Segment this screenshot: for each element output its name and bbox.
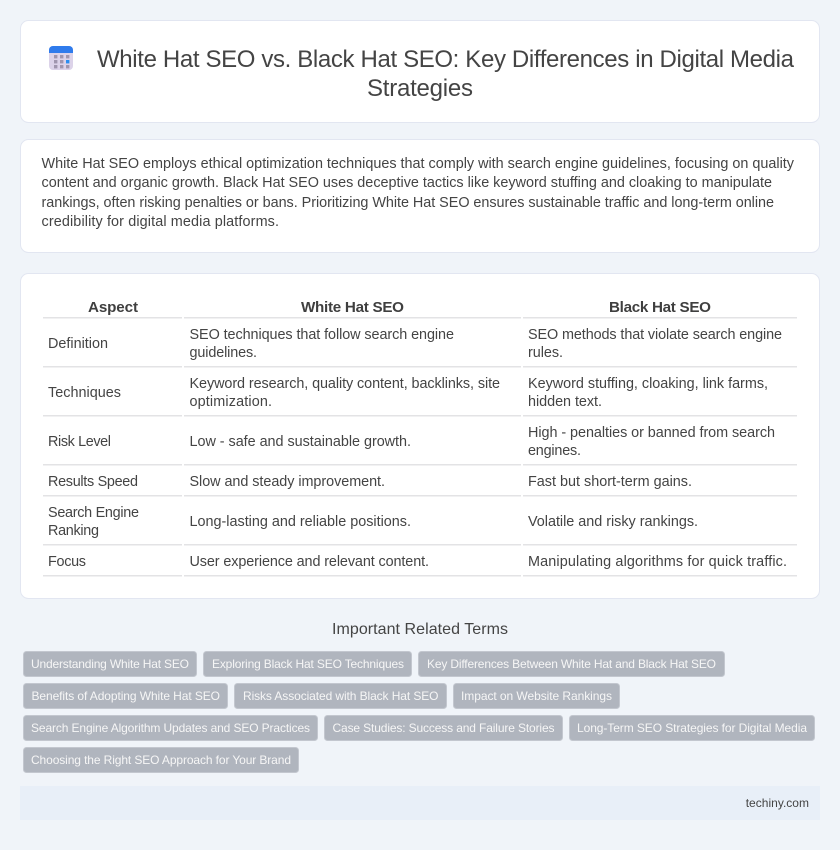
tag: risks: Risks Associated with Black Hat SEO [243,689,438,703]
tag: risks [234,684,446,708]
row: search engine ranking [43,505,797,546]
panel: introduction text [20,140,820,252]
row: definition: rules. [528,345,563,361]
panel: introduction text: rankings, often risking penalties or bans. Prioritizing White Hat SEO ensures sustainable traffic and long-term online [42,195,774,211]
panel: introduction text: White Hat SEO employs ethical optimization techniques that comply with search engine guidelines, focusing on quality [42,156,795,172]
table header: Aspect [88,299,138,316]
tag: long-term seo strategies: Long-Term SEO Strategies for Digital Media [577,721,807,735]
tag: case studies [324,716,562,740]
row: risk level: engines. [528,443,581,459]
tag: exploring black hat seo techniques: Exploring Black Hat SEO Techniques [212,657,404,671]
row: focus: User experience and relevant content. [190,554,429,570]
row: definition: Definition [48,336,108,352]
row: definition: guidelines. [190,345,257,361]
panel: comparison table [20,274,820,598]
icon: calendar [49,46,73,70]
tag: understanding white hat seo [24,652,196,676]
tag: choosing the right seo approach: Choosing the Right SEO Approach for Your Brand [31,753,291,767]
row: techniques: Keyword stuffing, cloaking, link farms, [528,376,768,392]
panel: related term tags [24,652,814,772]
table header: White Hat SEO [301,299,404,316]
row: definition [43,327,797,368]
title: White Hat SEO vs. Black Hat SEO: Key Differences in Digital Media [97,46,795,73]
panel: introduction text: credibility for digital media platforms. [42,214,279,230]
row: definition: SEO techniques that follow search engine [190,327,454,343]
tag: search engine algorithm updates: Search Engine Algorithm Updates and SEO Practices [31,721,310,735]
tag: long-term seo strategies [570,716,814,740]
row: search engine ranking: Long-lasting and reliable positions. [190,514,411,530]
tag: case studies: Case Studies: Success and Failure Stories [332,721,554,735]
row: techniques [43,376,797,416]
row: results speed: Results Speed [48,474,138,490]
row: risk level: High - penalties or banned from search [528,425,775,441]
heading: important related terms: Important Related Terms [332,621,508,638]
tag: benefits: Benefits of Adopting White Hat SEO [32,689,220,703]
title [97,46,795,102]
tag: benefits [24,684,228,708]
row: techniques: hidden text. [528,394,602,410]
row: results speed [43,474,797,496]
row: risk level [43,425,797,466]
row: search engine ranking: Ranking [48,523,99,539]
tag: key differences: Key Differences Between White Hat and Black Hat SEO [427,657,716,671]
row: search engine ranking: Volatile and risky rankings. [528,514,698,530]
row: definition: SEO methods that violate search engine [528,327,782,343]
tag: impact on website rankings [454,684,620,708]
panel: introduction text: content and organic growth. Black Hat SEO uses deceptive tactics like keyword stuffing and cloaking to manipulate [42,175,772,191]
row: techniques: Keyword research, quality content, backlinks, site [190,376,500,392]
row: focus [43,554,797,576]
row: focus: Focus [48,554,86,570]
panel: title header [20,20,820,122]
row: results speed: Fast but short-term gains. [528,474,692,490]
tag: choosing the right seo approach [24,748,298,772]
row: risk level: Risk Level [48,434,111,450]
footer [20,786,820,820]
row: search engine ranking: Search Engine [48,505,139,521]
tag: understanding white hat seo: Understanding White Hat SEO [31,657,189,671]
row: risk level: Low - safe and sustainable growth. [190,434,411,450]
tag: exploring black hat seo techniques [204,652,412,676]
tag: key differences [418,652,724,676]
table header: Black Hat SEO [609,299,711,316]
row: techniques: optimization. [190,394,272,410]
row: focus: Manipulating algorithms for quick traffic. [528,554,787,570]
title: Strategies [367,75,473,102]
table header [43,299,797,318]
tag: impact on website rankings: Impact on Website Rankings [461,689,612,703]
row: techniques: Techniques [48,385,121,401]
row: results speed: Slow and steady improvement. [190,474,385,490]
footer: techiny.com [746,796,809,810]
tag: search engine algorithm updates [24,716,318,740]
